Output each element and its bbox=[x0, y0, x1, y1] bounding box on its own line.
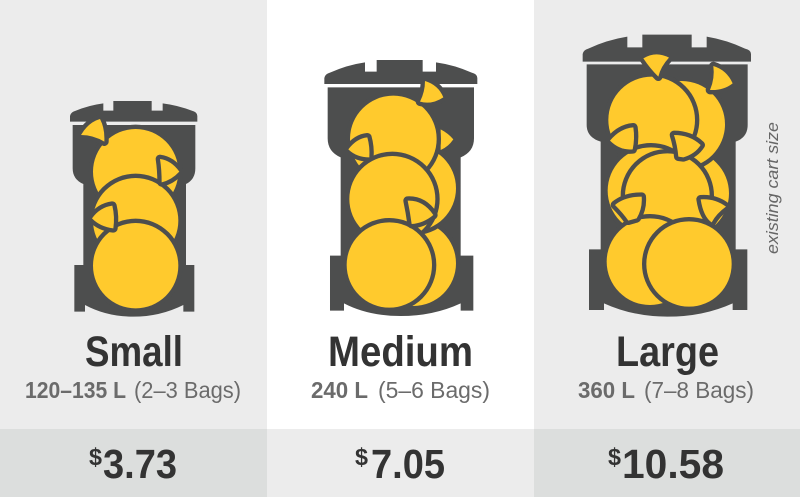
heading: Large: Large bbox=[616, 328, 719, 376]
panel: small background bbox=[0, 0, 267, 429]
capacity: medium: (5–6 Bags) bbox=[378, 377, 490, 403]
icon: small cart with bags bbox=[70, 101, 197, 317]
price: large: 10.58 bbox=[622, 441, 724, 487]
capacity: small: (2–3 Bags) bbox=[134, 377, 241, 403]
capacity: small bbox=[25, 377, 241, 403]
capacity: large bbox=[578, 377, 754, 403]
capacity: large: (7–8 Bags) bbox=[644, 377, 754, 403]
price: small: $ bbox=[89, 444, 103, 471]
icon: large cart with bags bbox=[583, 35, 751, 317]
price: medium: 7.05 bbox=[371, 441, 445, 487]
note: existing cart size: existing cart size bbox=[763, 122, 782, 254]
icon: medium cart with bags bbox=[324, 60, 477, 316]
capacity: small: 120–135 L bbox=[25, 377, 126, 403]
price band: small bbox=[0, 429, 267, 497]
price band: medium bbox=[267, 429, 534, 497]
capacity: large: 360 L bbox=[578, 377, 635, 403]
price: large: $ bbox=[608, 444, 622, 471]
capacity: medium bbox=[311, 377, 490, 403]
price: small: 3.73 bbox=[103, 441, 177, 487]
price band: large bbox=[534, 429, 800, 497]
heading: Small: Small bbox=[85, 328, 183, 376]
capacity: medium: 240 L bbox=[311, 377, 368, 403]
heading: Medium: Medium bbox=[328, 328, 473, 376]
panel: large background bbox=[534, 0, 800, 429]
panel: medium background bbox=[267, 0, 534, 429]
price: medium: $ bbox=[355, 444, 369, 471]
